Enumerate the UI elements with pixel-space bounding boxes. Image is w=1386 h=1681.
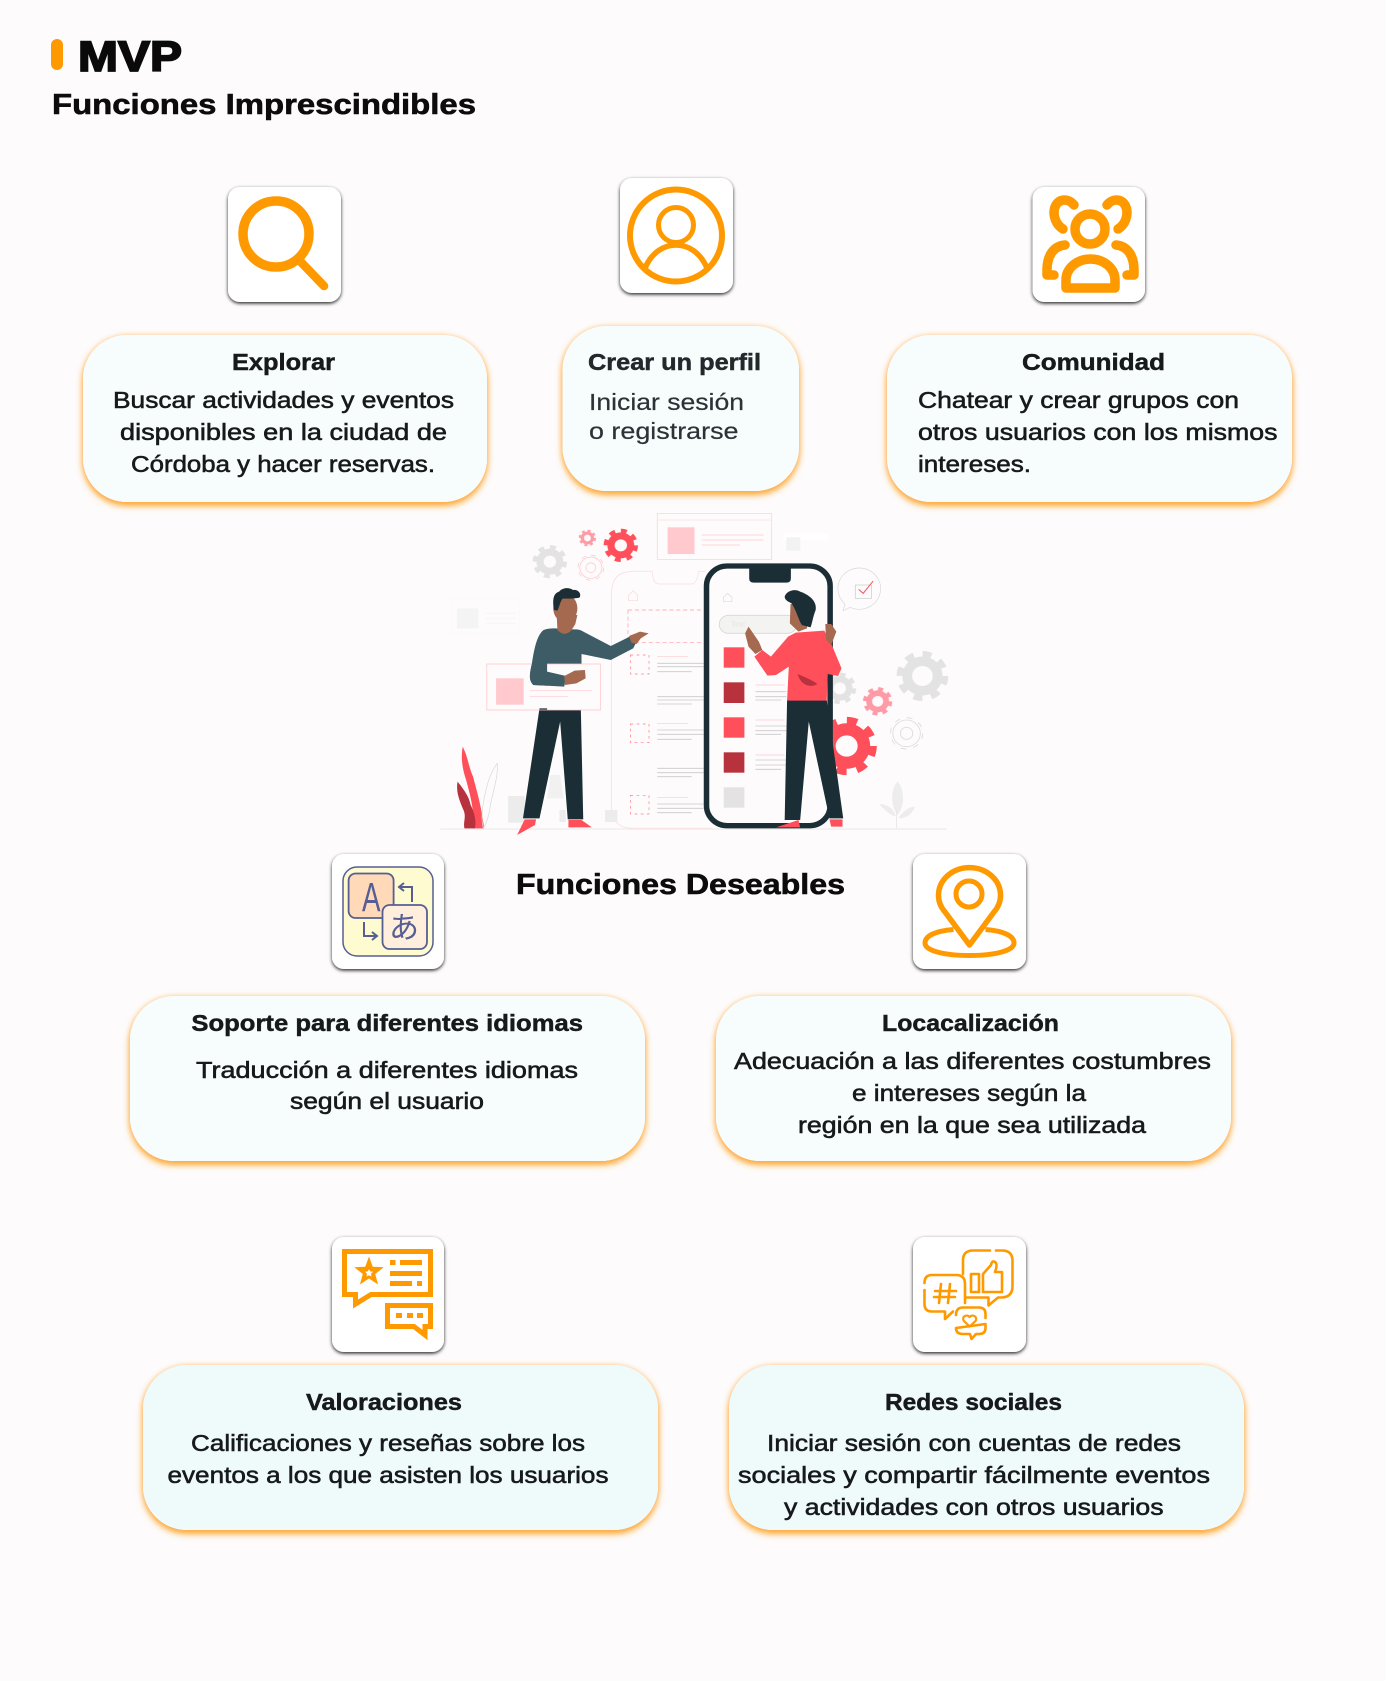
card text: e intereses según la [852,1080,1086,1106]
card title: Explorar [232,349,335,375]
ghost phone wireframe [611,571,712,828]
speech bubble with check [838,568,881,611]
faint blocks bottom left [508,775,617,823]
panel: Locacalización [716,996,1231,1161]
ground line [440,827,947,830]
card text: Buscar actividades y eventos [113,387,454,413]
gears top left [535,531,636,580]
card title: Locacalización [882,1010,1059,1036]
person left [487,588,649,835]
card title: Crear un perfil [588,349,761,375]
card text: Traducción a diferentes idiomas [196,1057,578,1083]
card text: otros usuarios con los mismos [918,419,1278,445]
title: MVP: MVP [78,33,182,81]
panel: Valoraciones [143,1365,658,1530]
card text: eventos a los que asisten los usuarios [168,1462,608,1488]
card text: sociales y compartir fácilmente eventos [738,1462,1210,1488]
heading: Funciones Deseables: Funciones Deseables [516,869,845,901]
icon: user profile [620,178,733,293]
card text: Calificaciones y reseñas sobre los [191,1430,585,1456]
card title: Soporte para diferentes idiomas [191,1010,583,1036]
card title: Redes sociales [885,1389,1062,1415]
gears right [820,654,945,772]
card title: Valoraciones [306,1389,462,1415]
card text: Chatear y crear grupos con [918,387,1239,413]
card text: Córdoba y hacer reservas. [131,451,435,477]
faint cards [451,533,828,633]
icon: translation [332,854,444,969]
card text [738,1430,1210,1520]
card text [734,1048,1211,1138]
card title: Comunidad [1022,349,1165,375]
card text [113,387,454,477]
wireframe card top [657,513,772,559]
card text [918,387,1278,477]
person right [745,590,843,827]
icon: ratings [332,1237,444,1352]
card text: Iniciar sesión [589,389,744,415]
icon: translation: あ [389,903,419,947]
icon: location pin [913,854,1026,969]
plant grey [879,782,915,828]
heading: Funciones Imprescindibles: Funciones Imprescindibles [52,89,476,121]
card text [168,1430,608,1488]
panel: Comunidad [887,335,1292,502]
panel: Soporte para diferentes idiomas [130,996,645,1161]
icon: search [228,187,341,302]
panel: Redes sociales [729,1365,1244,1530]
phone: Text [731,620,746,629]
card text: Iniciar sesión con cuentas de redes [767,1430,1181,1456]
phone [707,566,830,826]
panel: Explorar [83,335,487,502]
panel: Crear un perfil [562,326,799,491]
plant red [457,747,497,828]
card text [196,1057,578,1114]
card text: disponibles en la ciudad de [120,419,447,445]
card text: y actividades con otros usuarios [784,1494,1164,1520]
illustration: people designing a mobile app [440,513,947,835]
icon: translation: A [362,874,381,920]
card text: o registrarse [589,418,738,444]
icon: community [1032,187,1145,302]
card text: intereses. [918,451,1031,477]
card text [589,389,744,444]
icon: social networks [913,1237,1026,1352]
card text: según el usuario [290,1088,484,1114]
card text: Adecuación a las diferentes costumbres [734,1048,1211,1074]
card text: región en la que sea utilizada [798,1112,1146,1138]
